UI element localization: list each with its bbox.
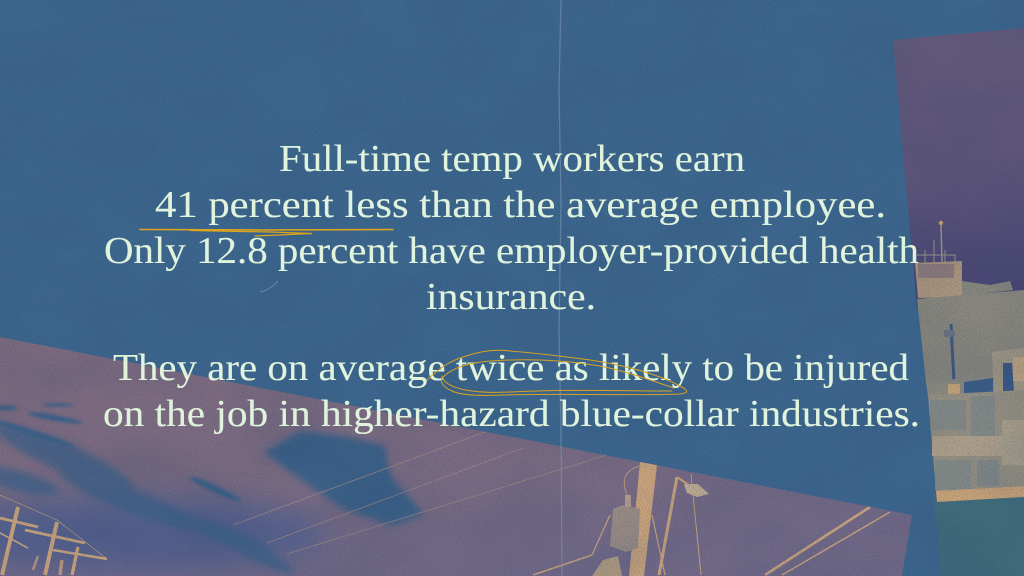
band under wall <box>926 375 994 396</box>
distant utility poles <box>0 495 107 575</box>
body text: injury risk: They are on average twice as likely to be injured <box>113 347 909 389</box>
headline text: pay and health insurance: Full-time temp workers earn <box>279 138 745 180</box>
panel: industrial building photo <box>893 28 1024 576</box>
upper deck <box>962 281 1013 296</box>
headline text: pay and health insurance: Only 12.8 percent have employer-provided health <box>104 230 919 272</box>
power lines <box>233 418 607 554</box>
wall vent <box>944 330 955 337</box>
hand-drawn circle around "twice as likely" <box>427 350 687 395</box>
paper creases <box>260 0 562 576</box>
machine <box>992 348 1024 394</box>
headline text: pay and health insurance: 41 percent less than the average employee. <box>155 184 886 226</box>
clouds <box>0 403 424 576</box>
ship tower <box>915 261 962 298</box>
grey hull wall <box>917 290 1024 382</box>
mast <box>917 220 956 263</box>
body text: injury risk: on the job in higher-hazard blue-collar industries. <box>103 393 920 435</box>
utility pole with transformer and street lamp <box>533 462 890 576</box>
wall slot <box>951 324 954 382</box>
panel: sky and utility poles photo <box>0 337 912 576</box>
hand-drawn underline <box>140 230 393 236</box>
headline text: pay and health insurance <box>104 138 919 318</box>
fence <box>928 390 1024 491</box>
water <box>930 495 1024 576</box>
headline text: pay and health insurance: insurance. <box>426 276 596 318</box>
body text: injury risk <box>103 347 920 435</box>
quay strip <box>936 486 1024 502</box>
